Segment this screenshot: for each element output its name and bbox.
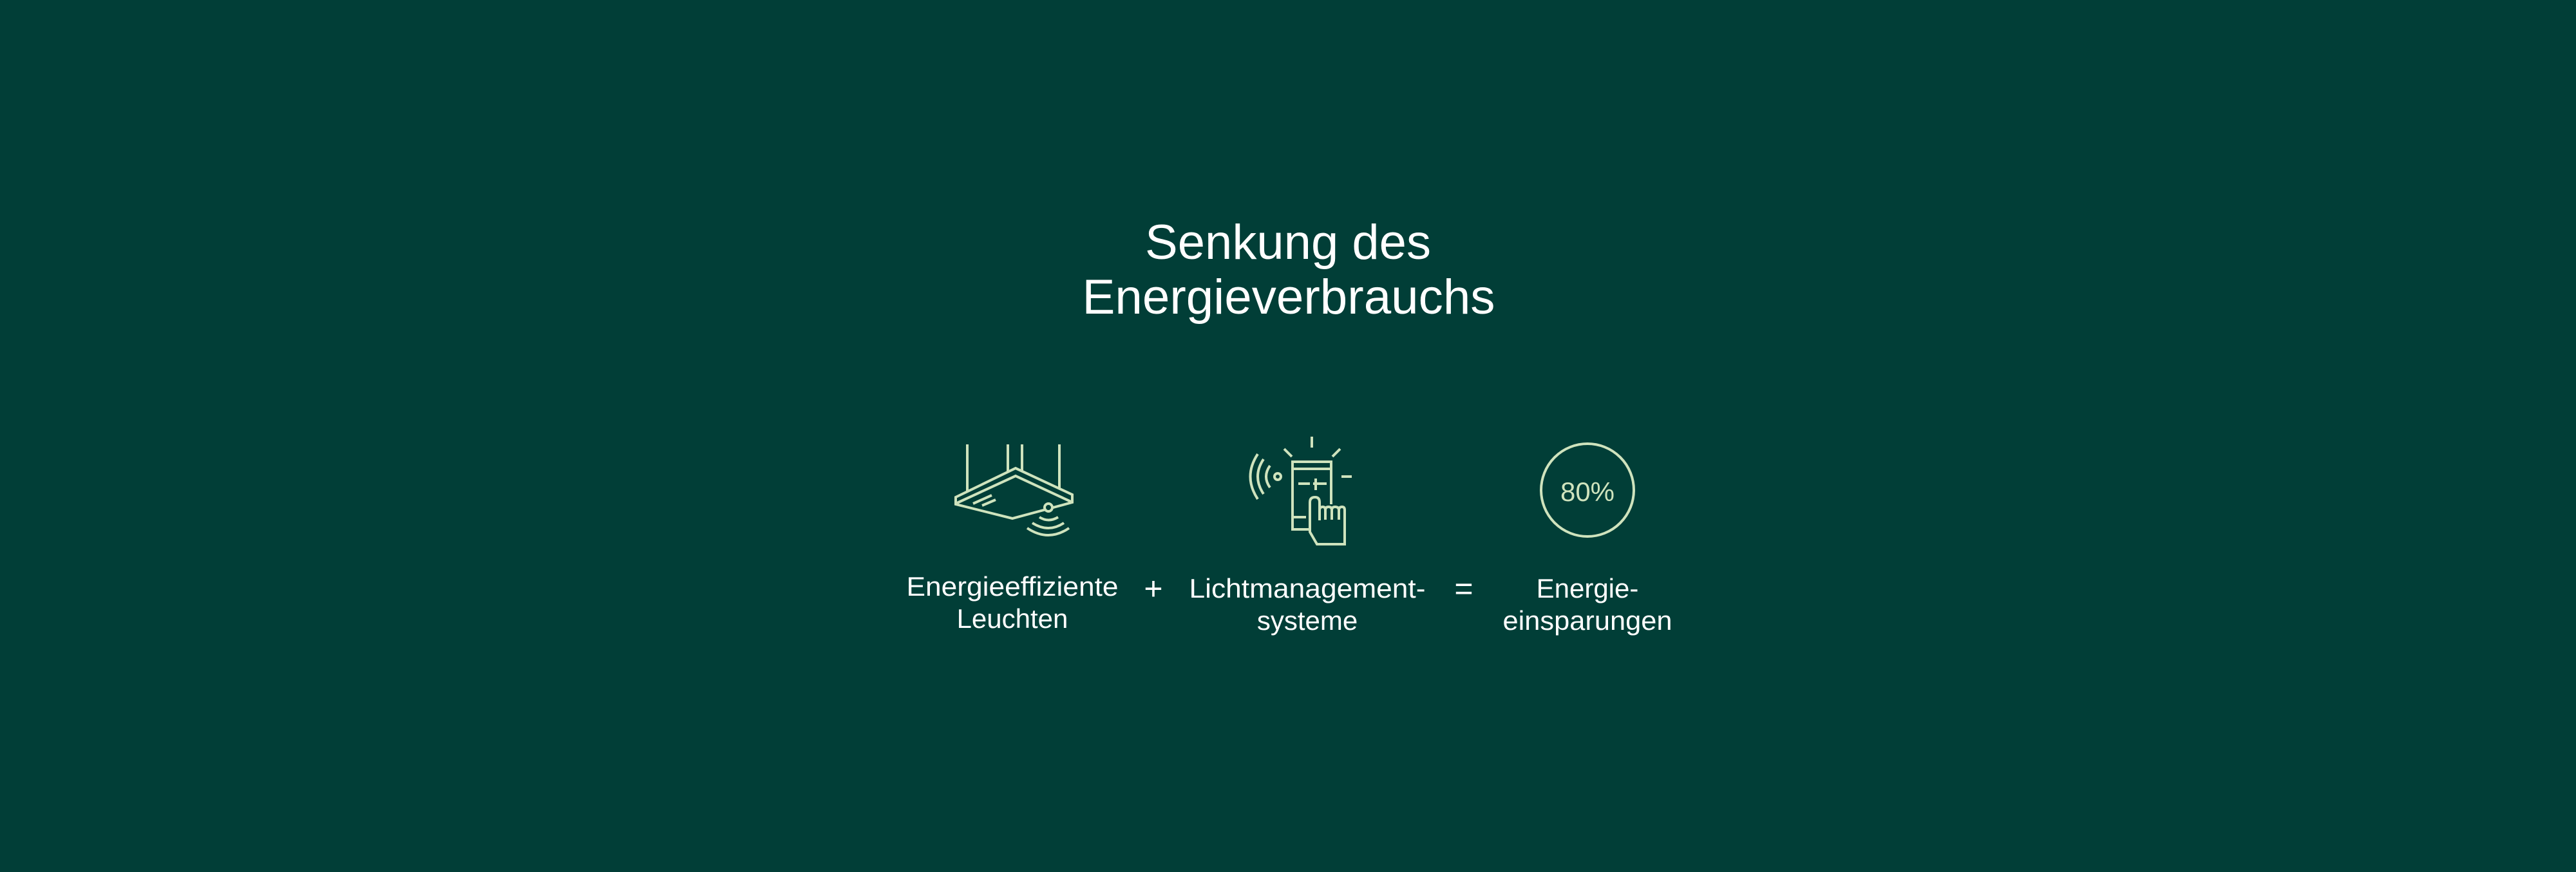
icon: 80% circle: 80%	[1560, 477, 1615, 507]
label: Energieeinsparungen: einsparungen	[1503, 605, 1672, 636]
icon: 80% circle	[1541, 444, 1634, 536]
label: Lichtmanagementsysteme: systeme	[1257, 605, 1358, 636]
icon: light management system	[1251, 437, 1352, 544]
label: Lichtmanagementsysteme: Lichtmanagement-	[1189, 573, 1426, 603]
icon: energy efficient luminaire	[956, 444, 1072, 535]
label: Lichtmanagementsysteme	[1189, 573, 1426, 636]
label: Energieeinsparungen: Energie-	[1537, 573, 1638, 603]
label: Energieeffiziente Leuchten	[907, 571, 1118, 634]
title: Energieverbrauchs	[1082, 270, 1495, 325]
label: Energieeffiziente Leuchten: Leuchten	[957, 603, 1068, 634]
title	[1082, 215, 1495, 325]
label: Energieeinsparungen	[1503, 573, 1672, 636]
label: Energieeffiziente Leuchten: Energieeffiziente	[907, 571, 1118, 602]
title: Senkung des	[1145, 215, 1431, 270]
plus sign: +	[1144, 571, 1163, 607]
equals sign: =	[1454, 571, 1473, 607]
